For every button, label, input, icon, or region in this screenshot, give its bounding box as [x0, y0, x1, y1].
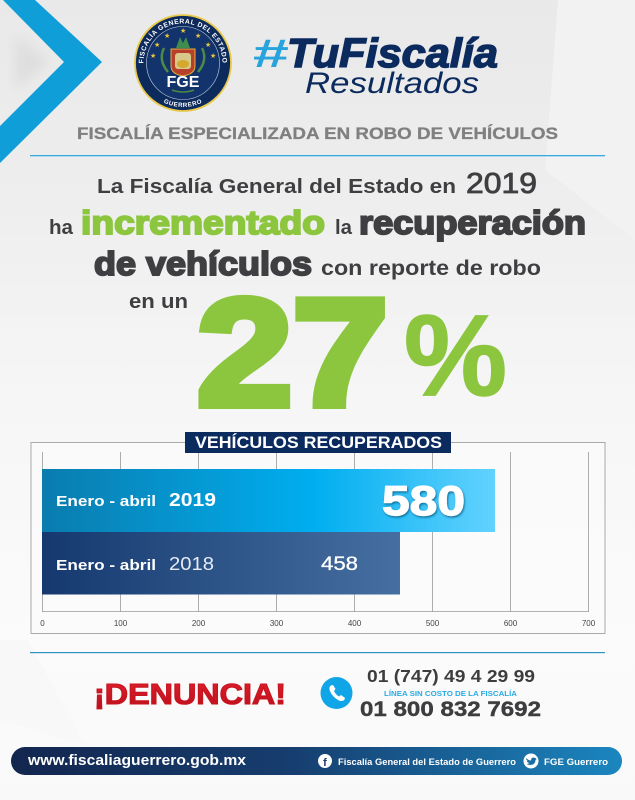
main statement: la — [335, 217, 353, 239]
facebook account: Fiscalía General del Estado de Guerrero — [338, 757, 516, 768]
main statement: con reporte de robo — [321, 257, 541, 280]
chart title: VEHÍCULOS RECUPERADOS — [195, 433, 442, 452]
logo: FGE seal: FGE — [166, 74, 200, 91]
main statement: en un — [129, 291, 188, 313]
x axis labels: 200 — [192, 619, 206, 628]
logo: FGE seal: FISCALÍA GENERAL DEL ESTADO — [138, 18, 228, 63]
contact phone numbers: LÍNEA SIN COSTO DE LA FISCALÍA — [384, 689, 518, 698]
main statement: 2019 — [466, 168, 537, 200]
bar: 2018: Enero - abril — [56, 557, 156, 574]
contact phone numbers: 01 800 832 7692 — [360, 698, 541, 721]
icon: facebook — [318, 754, 332, 769]
title: #TuFiscalía Resultados: TuFiscalía — [287, 30, 498, 76]
icon: facebook: f — [323, 757, 327, 769]
x axis labels — [40, 619, 596, 628]
main statement: ha — [49, 217, 74, 239]
bar: 2019: 580 — [382, 477, 465, 524]
logo: FGE seal: ★ — [205, 41, 211, 49]
bar: 2019: 2019 — [169, 489, 216, 510]
chevron decoration — [0, 0, 102, 163]
bar: 2018: 458 — [321, 554, 358, 575]
logo: FGE seal: ★ — [150, 52, 156, 60]
x axis labels: 0 — [40, 619, 45, 628]
title: #TuFiscalía Resultados: # — [252, 32, 289, 76]
main statement: incrementado — [81, 204, 325, 241]
bar: 2018 — [42, 532, 400, 594]
logo: FGE seal: ★ — [210, 52, 216, 60]
big figure: 27%: 27 — [197, 268, 388, 438]
x axis labels: 100 — [114, 619, 128, 628]
x axis labels: 400 — [348, 619, 362, 628]
bar: 2019 — [42, 469, 495, 532]
x axis labels: 500 — [426, 619, 440, 628]
logo: FGE seal: GUERRERO — [164, 99, 202, 108]
big figure: 27%: % — [404, 292, 507, 420]
bar: 2018: 2018 — [169, 553, 214, 574]
contact phone numbers: 01 (747) 49 4 29 99 — [367, 666, 535, 686]
heading: special prosecutor unit: FISCALÍA ESPECIALIZADA EN ROBO DE VEHÍCULOS — [77, 124, 558, 143]
logo: FGE seal — [134, 14, 232, 112]
footer bar — [11, 747, 622, 775]
icon: phone — [320, 677, 352, 709]
x axis labels: 600 — [504, 619, 518, 628]
logo: FGE seal: ★ — [164, 32, 170, 40]
title: #TuFiscalía Resultados — [252, 30, 498, 100]
contact phone numbers — [360, 666, 541, 721]
logo: FGE seal: ★ — [180, 27, 186, 35]
x axis labels: 700 — [582, 619, 596, 628]
website: www.fiscaliaguerrero.gob.mx — [27, 753, 246, 769]
call to action: denuncia: ¡DENUNCIA! — [94, 679, 286, 711]
bar chart: recovered vehicles — [31, 432, 605, 634]
main statement: de vehículos — [94, 245, 312, 282]
main statement — [49, 168, 586, 313]
logo: FGE seal: ★ — [154, 41, 160, 49]
main statement: La Fiscalía General del Estado en — [97, 176, 456, 198]
big figure: 27% — [197, 268, 507, 438]
logo: FGE seal: ★ — [195, 32, 201, 40]
twitter account: FGE Guerrero — [544, 757, 608, 768]
x axis labels: 300 — [270, 619, 284, 628]
main statement: recuperación — [359, 204, 586, 241]
icon: twitter — [524, 754, 538, 768]
bar: 2019: Enero - abril — [56, 493, 156, 510]
title: #TuFiscalía Resultados: Resultados — [305, 67, 479, 100]
